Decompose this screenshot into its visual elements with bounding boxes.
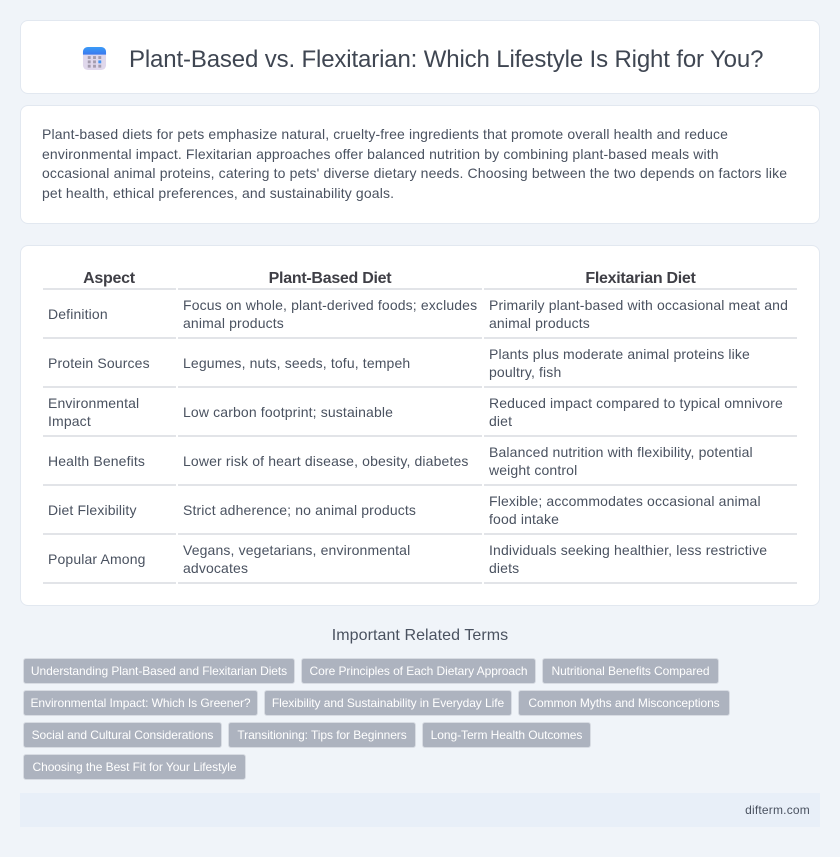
row: diet flexibility: Diet Flexibility [48,502,137,518]
row: environmental impact: Impact [48,413,91,429]
definition: flexitarian: animal products [489,315,590,331]
footer brand: difterm.com [745,803,810,817]
related terms tags: Core Principles of Each Dietary Approach [310,664,527,678]
related terms tags: Nutritional Benefits Compared [551,664,710,678]
environment: plant-based: Low carbon footprint; sustainable [183,404,393,420]
protein: flexitarian: poultry, fish [489,364,561,380]
flexibility: flexitarian: food intake [489,511,559,527]
environment: flexitarian: diet [489,413,512,429]
definition: flexitarian: Primarily plant-based with occasional meat and [489,297,788,313]
row: popular among: Popular Among [48,551,146,567]
health: flexitarian: Balanced nutrition with flexibility, potential [489,444,753,460]
health: plant-based: Lower risk of heart disease, obesity, diabetes [183,453,469,469]
definition: plant-based: animal products [183,315,284,331]
intro paragraph: environmental impact. Flexitarian approaches offer balanced nutrition by combining plant-based meals with [42,146,719,162]
related terms tags: Understanding Plant-Based and Flexitarian Diets [31,664,287,678]
related terms tags: Choosing the Best Fit for Your Lifestyle [32,760,236,774]
related terms heading: Important Related Terms [332,627,508,644]
related terms tags: Long-Term Health Outcomes [431,728,582,742]
row: environmental impact [48,395,139,429]
flexibility: flexitarian: Flexible; accommodates occasional animal [489,493,761,509]
intro text panel [20,105,820,224]
comparison table panel [20,245,820,606]
popular: plant-based [183,542,410,576]
intro paragraph [42,126,787,201]
table header: flexitarian diet: Flexitarian Diet [585,270,696,286]
row: environmental impact: Environmental [48,395,139,411]
protein: flexitarian: Plants plus moderate animal proteins like [489,346,750,362]
footer bar [20,793,820,827]
row: health benefits: Health Benefits [48,453,145,469]
related terms tags: Social and Cultural Considerations [32,728,213,742]
health: flexitarian [489,444,753,478]
definition: plant-based [183,297,477,331]
row: definition: Definition [48,306,108,322]
title: Plant-Based vs. Flexitarian: Which Lifestyle Is Right for You? [129,46,763,73]
protein: flexitarian [489,346,750,380]
intro paragraph: pet health, ethical preferences, and sustainability goals. [42,185,394,201]
related terms tags [23,658,730,780]
table header: plant-based diet: Plant-Based Diet [269,270,391,286]
intro paragraph: Plant-based diets for pets emphasize natural, cruelty-free ingredients that promote overall health and reduce [42,126,728,142]
popular: flexitarian [489,542,767,576]
health: flexitarian: weight control [489,462,577,478]
related terms tags: Flexibility and Sustainability in Everyday Life [272,696,504,710]
popular: flexitarian: Individuals seeking healthier, less restrictive [489,542,767,558]
header panel [20,20,820,94]
related terms tags: Common Myths and Misconceptions [528,696,720,710]
definition: flexitarian [489,297,788,331]
definition: plant-based: Focus on whole, plant-derived foods; excludes [183,297,477,313]
table header: aspect: Aspect [83,270,135,286]
intro paragraph: occasional animal proteins, catering to pets' diverse dietary needs. Choosing between the two depends on factors like [42,165,787,181]
related terms tags: Transitioning: Tips for Beginners [237,728,407,742]
popular: flexitarian: diets [489,560,519,576]
environment: flexitarian [489,395,783,429]
flexibility: flexitarian [489,493,761,527]
flexibility: plant-based: Strict adherence; no animal products [183,502,416,518]
icon: calendar [82,47,106,70]
environment: flexitarian: Reduced impact compared to typical omnivore [489,395,783,411]
related terms tags: Environmental Impact: Which Is Greener? [30,696,251,710]
protein: plant-based: Legumes, nuts, seeds, tofu, tempeh [183,355,410,371]
row: protein sources: Protein Sources [48,355,150,371]
popular: plant-based: Vegans, vegetarians, environmental [183,542,410,558]
popular: plant-based: advocates [183,560,248,576]
